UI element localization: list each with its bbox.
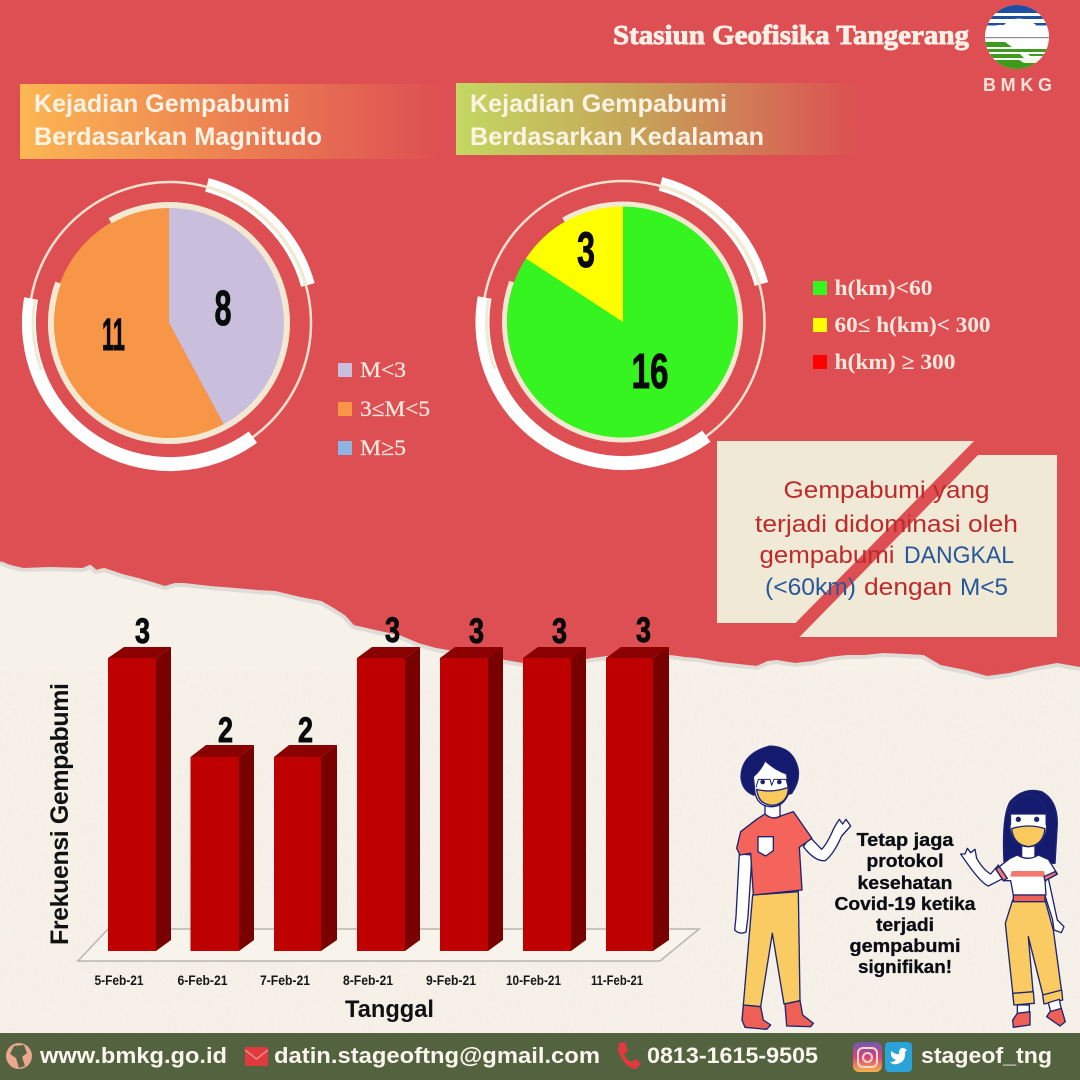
pie chart: magnitude: 11 (102, 309, 125, 360)
bar: 10-Feb-21 (523, 647, 586, 951)
x axis date labels: 8-Feb-21 (343, 972, 393, 988)
x axis title: Tanggal (345, 996, 434, 1023)
icon: instagram (853, 1042, 882, 1072)
legend: magnitude (338, 357, 430, 460)
legend: depth: h(km) ≥ 300 (834, 349, 956, 374)
bar values: 2 (218, 711, 233, 750)
legend: depth (813, 275, 990, 374)
bar values: 3 (552, 612, 567, 651)
text: health reminder: Tetap jaga (856, 830, 955, 850)
text: health reminder (834, 830, 977, 977)
x axis date labels (94, 972, 643, 988)
pie chart: magnitude (29, 182, 311, 464)
text: health reminder: Covid-19 ketika (834, 894, 977, 914)
x axis date labels: 5-Feb-21 (94, 972, 144, 988)
legend: depth: 60≤ h(km)< 300 (834, 312, 990, 337)
icon: mail (245, 1047, 268, 1066)
heading: depth: Berdasarkan Kedalaman (470, 123, 764, 151)
text: health reminder: gempabumi (850, 936, 960, 956)
bar: 7-Feb-21 (274, 745, 337, 951)
heading: magnitude: Kejadian Gempabumi (34, 90, 290, 118)
pie chart: magnitude: 8 (214, 282, 232, 336)
x axis date labels: 6-Feb-21 (178, 972, 228, 988)
title: station name: Stasiun Geofisika Tangerang (613, 20, 970, 50)
bar chart: daily frequency (46, 611, 699, 1023)
icon: globe (6, 1043, 32, 1069)
text: health reminder: terjadi (876, 915, 934, 935)
heading: magnitude: Berdasarkan Magnitudo (34, 123, 322, 151)
bar: 11-Feb-21 (606, 647, 669, 951)
text: health reminder: kesehatan (858, 873, 952, 893)
pie chart: depth: 3 (577, 222, 595, 278)
website: www.bmkg.go.id (39, 1043, 227, 1068)
bar: 6-Feb-21 (190, 745, 254, 951)
callout: conclusion: gempabumi (760, 542, 894, 569)
torn paper background (0, 563, 1080, 1033)
x axis date labels: 7-Feb-21 (260, 972, 310, 988)
x axis date labels: 10-Feb-21 (506, 972, 561, 988)
legend: magnitude: M≥5 (360, 435, 406, 460)
heading: magnitude (20, 84, 445, 159)
bar: 9-Feb-21 (440, 647, 503, 951)
pie chart: depth: 16 (632, 345, 668, 399)
icon: twitter (885, 1042, 912, 1072)
logo wordmark: BMKG (983, 75, 1052, 95)
legend: magnitude: 3≤M<5 (360, 396, 430, 421)
text: health reminder: signifikan! (858, 957, 952, 977)
phone number: 0813-1615-9505 (647, 1043, 818, 1068)
bar values: 3 (135, 612, 150, 651)
bar values: 3 (636, 611, 651, 650)
bar values: 2 (298, 711, 313, 750)
callout: conclusion: DANGKAL (904, 542, 1014, 569)
callout: conclusion: Gempabumi yang (784, 477, 990, 504)
heading: depth: Kejadian Gempabumi (470, 90, 727, 118)
y axis title: Frekuensi Gempabumi (46, 683, 74, 945)
icon: BMKG logo (985, 5, 1050, 70)
heading: depth (456, 83, 861, 155)
x axis date labels: 11-Feb-21 (591, 972, 643, 988)
illustration: girl with mask (961, 790, 1065, 1027)
legend: magnitude: M<3 (360, 357, 406, 382)
x axis date labels: 9-Feb-21 (426, 972, 476, 988)
social handle: stageof_tng (921, 1043, 1052, 1068)
text: health reminder: protokol (866, 851, 944, 871)
email: datin.stageoftng@gmail.com (274, 1043, 600, 1068)
icon: phone (618, 1042, 641, 1069)
callout: conclusion: M<5 (960, 574, 1008, 601)
illustration: boy with mask (735, 746, 851, 1029)
callout: conclusion: dengan (864, 574, 952, 601)
bar values (135, 611, 651, 750)
bar values: 3 (385, 611, 400, 650)
callout: conclusion: terjadi didominasi oleh (755, 511, 1018, 538)
pie chart: depth (482, 181, 764, 463)
legend: depth: h(km)<60 (834, 275, 932, 300)
callout: conclusion: (<60km) (765, 574, 856, 601)
callout: conclusion (717, 441, 1057, 637)
bar: 8-Feb-21 (357, 647, 420, 951)
bar: 5-Feb-21 (108, 647, 171, 951)
bar values: 3 (469, 612, 484, 651)
footer bar (0, 1033, 1080, 1080)
